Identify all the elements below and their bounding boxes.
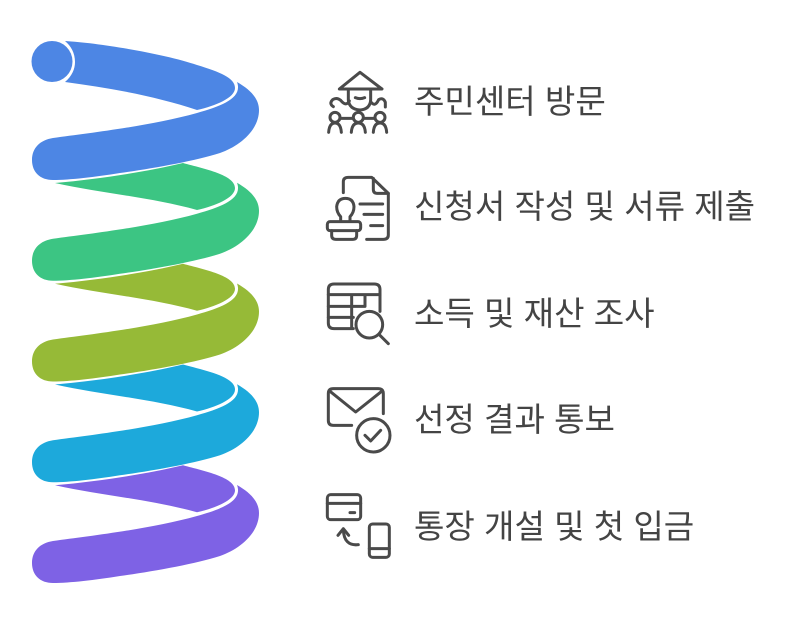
- coil 2: green: [32, 163, 259, 281]
- spiral spring: [32, 41, 259, 583]
- coil 5: purple: [32, 465, 259, 583]
- step 1 label: 주민센터 방문: [414, 84, 606, 121]
- step 3 label: 소득 및 재산 조사: [414, 296, 655, 333]
- coil 4: teal: [32, 364, 259, 482]
- icon: community center: [329, 72, 387, 132]
- icon: table with magnifier: [328, 284, 388, 344]
- icon: envelope with check: [328, 389, 390, 452]
- step 4 label: 선정 결과 통보: [414, 402, 615, 439]
- step 5 label: 통장 개설 및 첫 입금: [414, 509, 694, 546]
- step 2 label: 신청서 작성 및 서류 제출: [414, 189, 755, 226]
- coil 3: olive: [32, 264, 259, 382]
- coil 1: blue: [32, 41, 259, 180]
- icon: bankbook and phone: [327, 495, 389, 557]
- icon: application form with stamp: [327, 177, 388, 239]
